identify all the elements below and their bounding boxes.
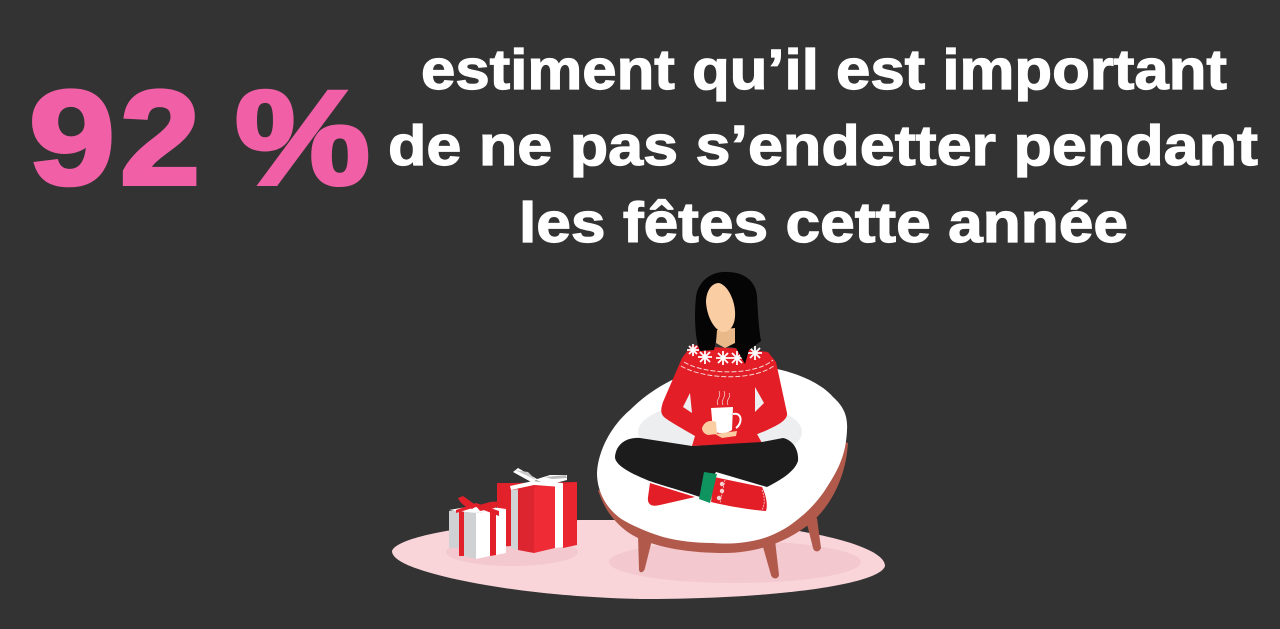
big percentage: %: [235, 64, 370, 213]
headline text: de ne pas s’endetter pendant: [388, 114, 1258, 178]
mug and hands: [702, 391, 741, 438]
gift: small white box: [449, 496, 506, 559]
big percentage: 2: [120, 64, 200, 213]
rug: [392, 520, 885, 599]
big percentage: 9: [29, 64, 115, 213]
sweater: [661, 344, 787, 446]
headline text: les fêtes cette année: [519, 191, 1128, 255]
hair: [695, 272, 761, 364]
headline text: [388, 38, 1258, 255]
socks: [648, 477, 767, 511]
face and neck: [706, 283, 735, 348]
gift: large red box: [497, 468, 577, 553]
chair: [597, 365, 848, 578]
green cuff: [699, 472, 717, 503]
big percentage: [29, 64, 370, 213]
headline text: estiment qu’il est important: [421, 38, 1227, 102]
illustration: woman on chair with gifts: [392, 272, 885, 599]
black leggings: [615, 438, 798, 497]
